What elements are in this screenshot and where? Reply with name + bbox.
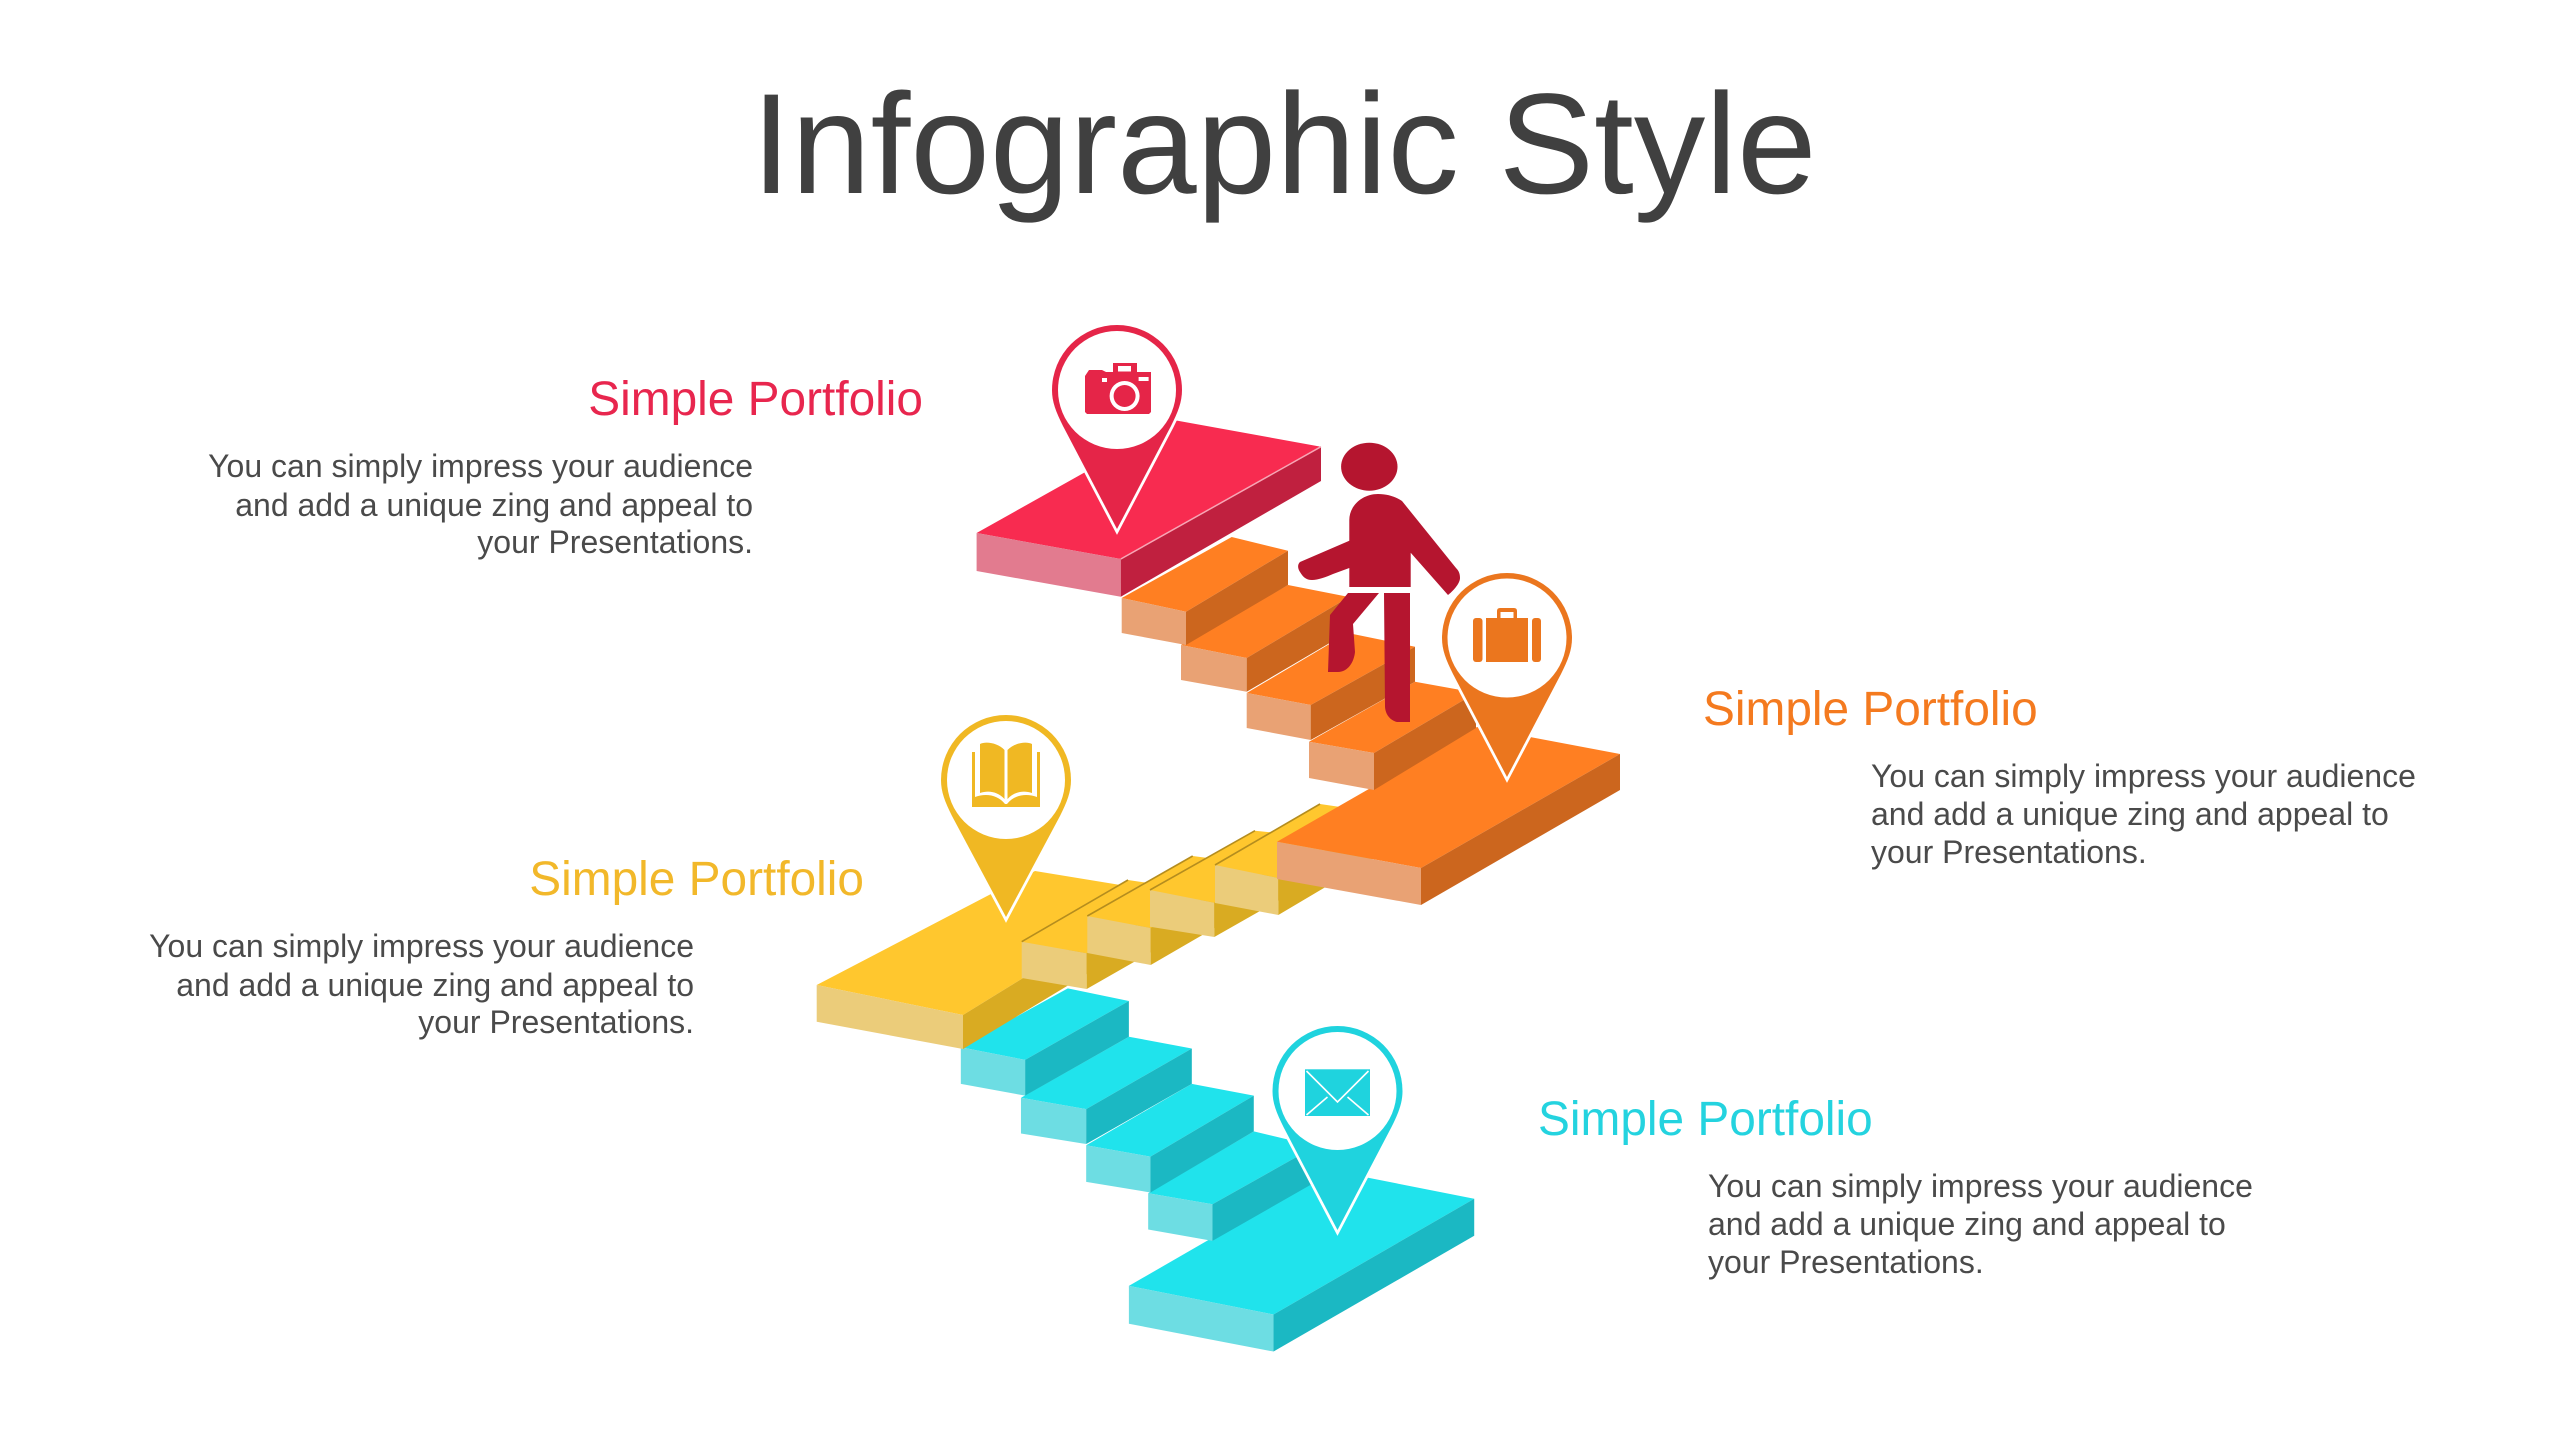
text block: yellow: and add a unique zing and appeal to [176, 967, 694, 1003]
icon: camera [1085, 363, 1151, 414]
icon: envelope [1305, 1069, 1370, 1116]
text block: cyan: and add a unique zing and appeal to [1708, 1206, 2226, 1242]
text block: cyan: You can simply impress your audience [1708, 1168, 2253, 1204]
text block: orange: You can simply impress your audience [1871, 758, 2416, 794]
text block: red: and add a unique zing and appeal to [235, 487, 753, 523]
text block: orange: Simple Portfolio [1703, 683, 2038, 736]
stair flight: cyan [961, 988, 1474, 1352]
text block: cyan [1538, 1093, 2253, 1280]
top landing: red [977, 421, 1321, 597]
icon: open book [972, 743, 1040, 807]
text block: yellow: You can simply impress your audience [149, 928, 694, 964]
text block: yellow [149, 853, 864, 1040]
pin: camera [1052, 325, 1182, 529]
text block: yellow: your Presentations. [418, 1004, 694, 1040]
title: Infographic Style [751, 65, 1817, 224]
text block: red: Simple Portfolio [588, 373, 923, 426]
pin: book [941, 715, 1071, 917]
figure climbing the stairs [1298, 443, 1460, 722]
text block: red: You can simply impress your audience [208, 448, 753, 484]
text block: orange: your Presentations. [1871, 834, 2147, 870]
pin: envelope [1272, 1026, 1402, 1230]
text block: orange: and add a unique zing and appeal to [1871, 796, 2389, 832]
stair flight: yellow [817, 804, 1388, 1049]
stair flight: orange [1122, 537, 1620, 905]
text block: cyan: your Presentations. [1708, 1244, 1984, 1280]
pin: briefcase [1442, 573, 1572, 777]
text block: yellow: Simple Portfolio [529, 853, 864, 906]
text block: cyan: Simple Portfolio [1538, 1093, 1873, 1146]
icon: briefcase [1473, 608, 1541, 662]
text block: orange [1703, 683, 2416, 870]
text block: red [208, 373, 923, 560]
text block: red: your Presentations. [477, 524, 753, 560]
